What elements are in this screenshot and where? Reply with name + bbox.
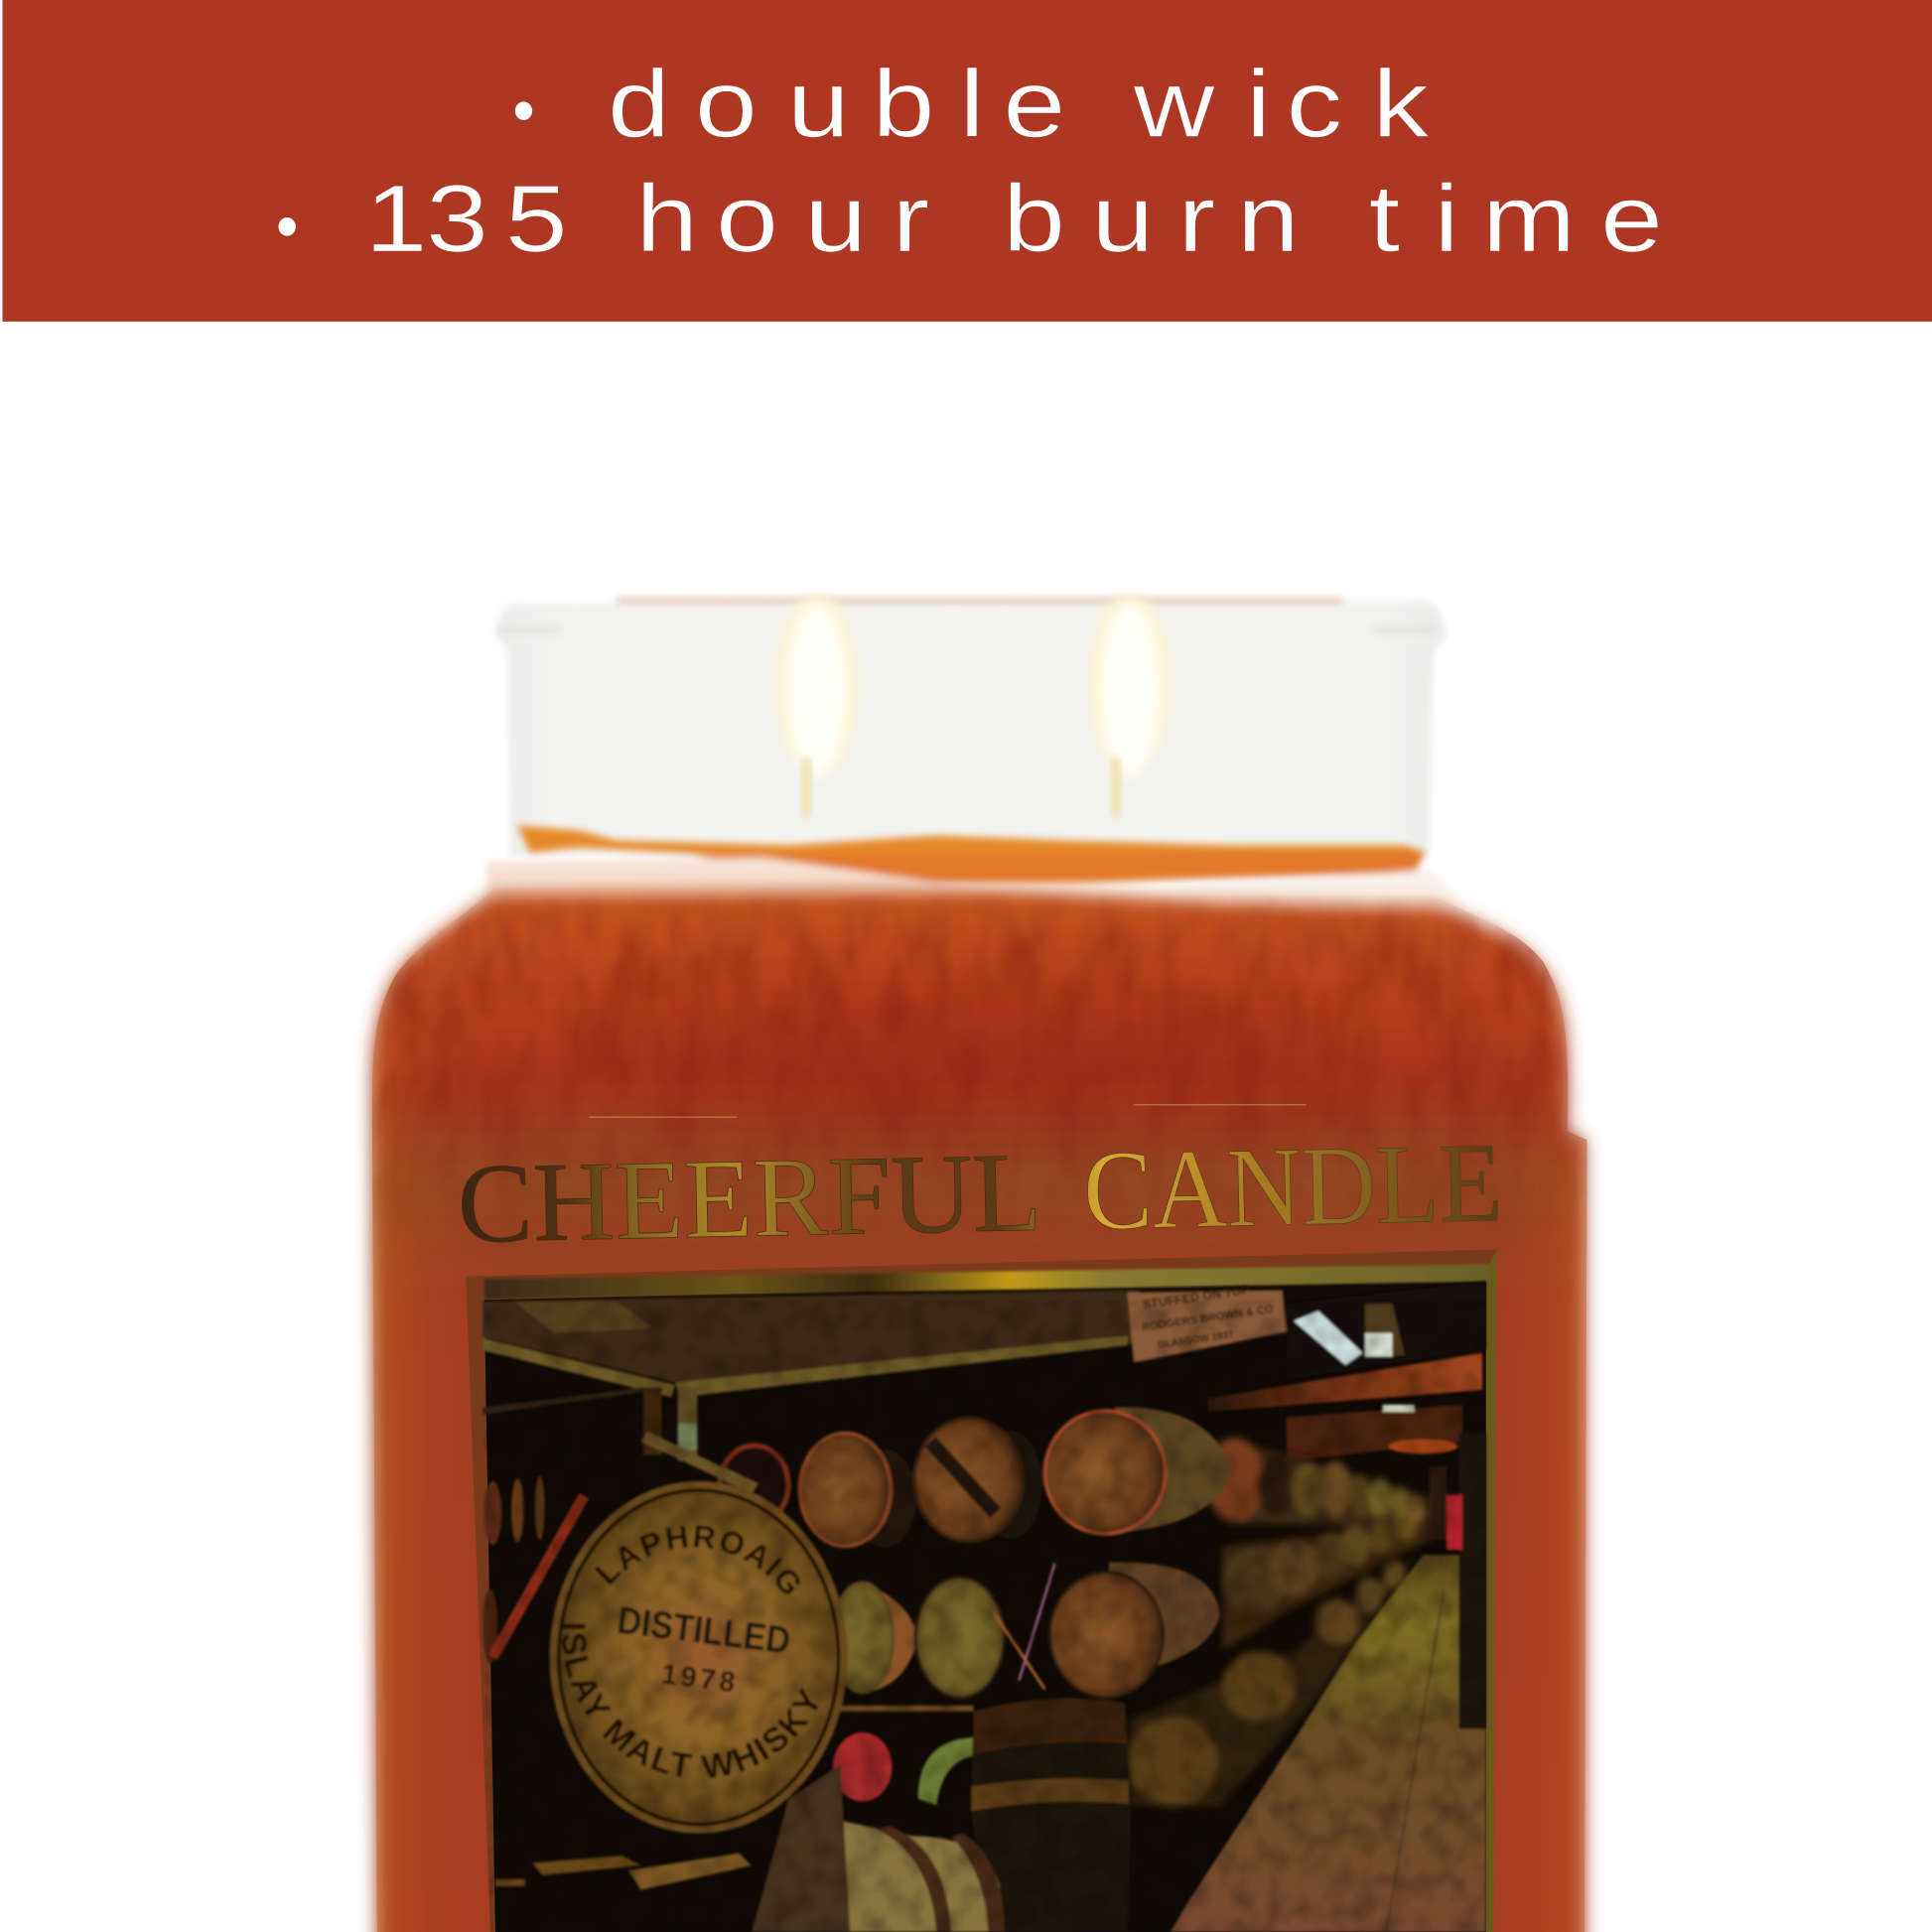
front tipped barrel [752,1764,1004,1932]
barrel stencil: 1978: 1978 [659,1658,737,1699]
big stencilled barrel head [548,1432,848,1835]
ceiling right: red beams [1207,1282,1486,1461]
barrel stencil: DISTILLED: DISTILLED [615,1599,792,1663]
debris foreground [495,1854,752,1890]
red rope stick [492,1496,584,1657]
lower shelf, red and green glow [833,1706,973,1805]
feature text: double wick: double wick [608,52,1430,158]
support posts [643,1387,697,1461]
warehouse sign: RODGERS BROWN & CO [1141,1304,1275,1333]
floor aisle [1171,1555,1486,1932]
warehouse sign: GLASGOW 1937 [1157,1329,1235,1351]
header banner [2,0,1932,322]
brand name: gold foil: CANDLE [1082,1119,1503,1254]
gold band [484,1264,1488,1299]
bullet: double wick [515,101,532,120]
barrel stack: top row [720,1407,1232,1548]
barrel stencil: LAPHROAIG: LAPHROAIG [594,1524,801,1595]
ceiling light [1294,1304,1405,1365]
barrel stencil: ISLAY MALT WHISKY: ISLAY MALT WHISKY [560,1622,819,1779]
feature text: 135 hour burn time: 135 hour burn time [365,166,1663,272]
far post and figure [1430,1433,1486,1728]
left faint barrels [483,1476,545,1663]
label photo: whisky warehouse [466,1249,1497,1932]
candle jar [357,590,1599,1932]
ceiling beams [483,1290,1140,1415]
warehouse sign: STUFFED ON TOP [1142,1283,1250,1311]
glass neck and lip [495,599,1447,857]
flame: left wick [776,595,858,817]
brand name: gold foil: CHEERFUL [457,1129,1042,1267]
flame: right wick [1089,595,1171,817]
brand name: gold foil [457,1119,1503,1267]
bullet: burn time [278,217,296,236]
upright barrel [971,1699,1131,1932]
receding barrels [1129,1438,1430,1806]
faint seam highlights [589,1104,1307,1118]
melted wax pool [486,826,1466,905]
jar body: red-orange wax [364,888,1596,1932]
label background [466,1249,1497,1932]
photo grain [484,1300,1486,1932]
barrel stack: second row [830,1562,1220,1701]
warehouse sign [1128,1283,1287,1363]
